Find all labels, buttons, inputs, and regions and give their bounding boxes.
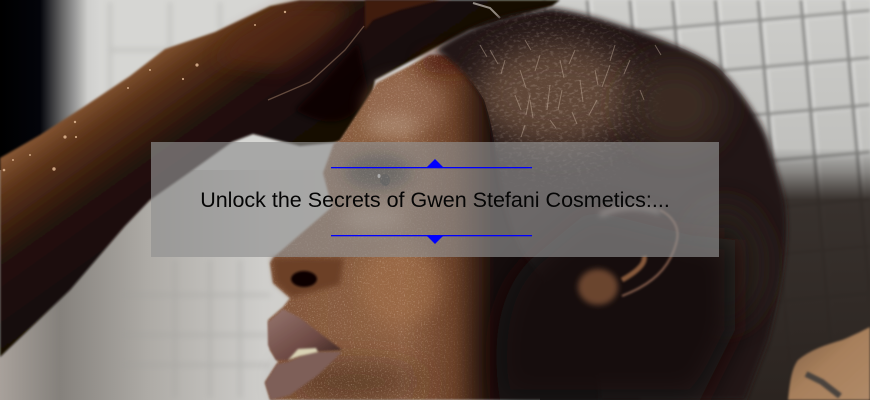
- top rule: [331, 167, 532, 168]
- bottom rule: [331, 235, 532, 236]
- deep shadow on jaw and neck: [496, 210, 735, 400]
- title: Unlock the Secrets of Gwen Stefani Cosmetics:...: [200, 188, 670, 212]
- lips: [265, 309, 342, 400]
- nose and nostril: [272, 257, 344, 297]
- bottom triangle ornament: [427, 236, 443, 244]
- top triangle ornament: [427, 159, 443, 167]
- shoulder with tattoo: [788, 327, 870, 400]
- hair: [436, 0, 790, 400]
- face in profile: [260, 50, 640, 400]
- title panel: [151, 142, 719, 257]
- skin speckle: [260, 50, 480, 400]
- arm raised to the head: [0, 0, 560, 357]
- ear: [578, 207, 678, 305]
